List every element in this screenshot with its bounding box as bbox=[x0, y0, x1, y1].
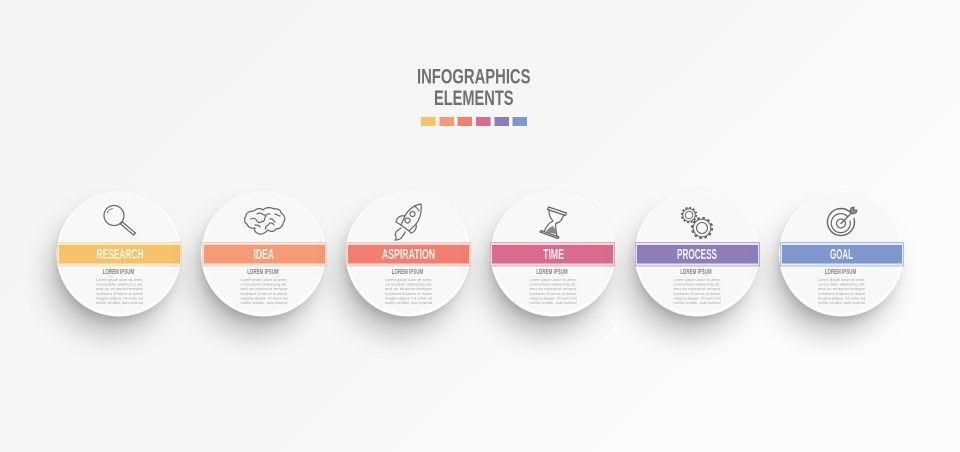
label band: PROCESS bbox=[677, 246, 717, 263]
icon: magnifier bbox=[104, 206, 136, 235]
description: minim veniam, quis nostrud bbox=[530, 300, 576, 305]
description: LOREM IPSUM bbox=[247, 267, 279, 276]
label band: RESEARCH bbox=[96, 246, 144, 263]
description: sed do eiusmod tempor bbox=[240, 286, 288, 291]
description: consectetur adipiscing elit, bbox=[530, 282, 576, 287]
description: incididunt ut labore et dolore bbox=[530, 291, 577, 296]
description: magna aliqua. Ut enim ad bbox=[818, 295, 865, 300]
description: consectetur adipiscing elit, bbox=[674, 282, 720, 287]
label band: GOAL bbox=[830, 246, 853, 263]
icon: hourglass bbox=[540, 207, 566, 238]
description: sed do eiusmod tempor bbox=[818, 286, 866, 291]
icon: gears bbox=[682, 208, 712, 238]
label band bbox=[780, 242, 904, 266]
description: minim veniam, quis nostrud bbox=[818, 300, 865, 305]
description: Lorem ipsum dolor sit amet, bbox=[385, 277, 432, 282]
description: magna aliqua. Ut enim ad bbox=[240, 295, 288, 300]
label band bbox=[58, 242, 182, 266]
icon: target bbox=[827, 207, 857, 236]
panel: aspiration bbox=[341, 192, 470, 332]
description: incididunt ut labore et dolore bbox=[96, 291, 144, 296]
description: magna aliqua. Ut enim ad bbox=[530, 295, 576, 300]
description: consectetur adipiscing elit, bbox=[240, 282, 288, 287]
label band: TIME bbox=[543, 246, 564, 263]
description: consectetur adipiscing elit, bbox=[818, 282, 865, 287]
description: consectetur adipiscing elit, bbox=[96, 282, 143, 287]
label band bbox=[202, 242, 326, 266]
description: incididunt ut labore et dolore bbox=[385, 291, 433, 296]
label band bbox=[346, 242, 470, 266]
description: LOREM IPSUM bbox=[392, 267, 423, 276]
panel: goal bbox=[774, 192, 904, 332]
description: consectetur adipiscing elit, bbox=[385, 282, 432, 287]
description: incididunt ut labore et dolore bbox=[818, 291, 866, 296]
description: magna aliqua. Ut enim ad bbox=[385, 295, 432, 300]
panel: time bbox=[486, 192, 616, 332]
description: LOREM IPSUM bbox=[103, 267, 134, 276]
description bbox=[674, 267, 721, 305]
description: Lorem ipsum dolor sit amet, bbox=[240, 277, 288, 282]
description: incididunt ut labore et dolore bbox=[240, 291, 288, 296]
title: ELEMENTS bbox=[434, 87, 514, 110]
description: Lorem ipsum dolor sit amet, bbox=[818, 277, 865, 282]
description: Lorem ipsum dolor sit amet, bbox=[674, 277, 720, 282]
description: sed do eiusmod tempor bbox=[674, 286, 721, 291]
description: Lorem ipsum dolor sit amet, bbox=[530, 277, 576, 282]
label band bbox=[636, 242, 760, 266]
description: LOREM IPSUM bbox=[825, 267, 856, 276]
description bbox=[385, 267, 433, 305]
description: Lorem ipsum dolor sit amet, bbox=[96, 277, 143, 282]
icon: rocket bbox=[395, 204, 421, 240]
description: minim veniam, quis nostrud bbox=[385, 300, 432, 305]
description: minim veniam, quis nostrud bbox=[96, 300, 143, 305]
panel: research bbox=[52, 192, 182, 332]
colour swatches bbox=[421, 117, 527, 126]
description bbox=[818, 267, 866, 305]
description: sed do eiusmod tempor bbox=[530, 286, 577, 291]
description: magna aliqua. Ut enim ad bbox=[674, 295, 720, 300]
description: minim veniam, quis nostrud bbox=[674, 300, 720, 305]
panel: process bbox=[630, 192, 760, 332]
title: INFOGRAPHICS bbox=[417, 66, 530, 88]
label band bbox=[490, 242, 614, 266]
label band: ASPIRATION bbox=[382, 246, 435, 263]
title bbox=[417, 66, 530, 110]
description: magna aliqua. Ut enim ad bbox=[96, 295, 143, 300]
description: LOREM IPSUM bbox=[680, 267, 712, 276]
label band: IDEA bbox=[254, 246, 274, 263]
description bbox=[240, 267, 288, 305]
icon: brain bbox=[245, 208, 285, 234]
description bbox=[96, 267, 144, 305]
description: sed do eiusmod tempor bbox=[96, 286, 144, 291]
description: LOREM IPSUM bbox=[536, 267, 568, 276]
description: minim veniam, quis nostrud bbox=[240, 300, 288, 305]
description: sed do eiusmod tempor bbox=[385, 286, 433, 291]
panel: idea bbox=[196, 192, 326, 332]
description bbox=[530, 267, 577, 305]
description: incididunt ut labore et dolore bbox=[674, 291, 721, 296]
